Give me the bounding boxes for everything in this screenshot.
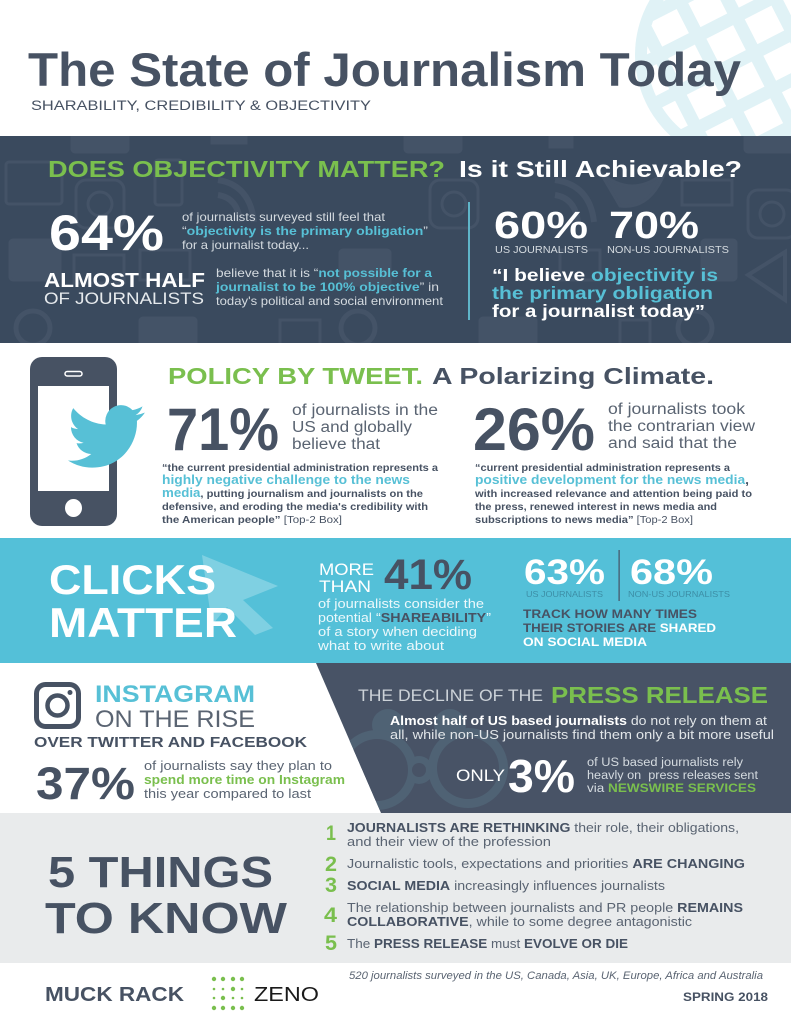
stat: almost half: ALMOST HALF (44, 270, 205, 292)
subtitle: SHARABILITY, CREDIBILITY & OBJECTIVITY (31, 98, 371, 113)
stat: more than 41% (319, 551, 472, 599)
stats: 63% and 68%: US JOURNALISTS (526, 589, 603, 599)
text: almost half description: today's political and social environment (216, 294, 444, 308)
text: shareability (317, 597, 491, 653)
text: track shares: THEIR STORIES ARE SHARED (523, 621, 716, 635)
text: shareability: potential “ SHAREABILITY ” (318, 611, 491, 625)
text: 37% description: of journalists say they plan to (144, 759, 332, 773)
heading (34, 681, 308, 751)
text: 64% description: of journalists surveyed still feel that (182, 210, 386, 224)
heading: 5 THINGS (48, 849, 273, 897)
heading (49, 556, 237, 646)
item 2 (325, 853, 745, 876)
item 1 (326, 821, 739, 849)
stat: more than 41%: THAN (319, 578, 371, 596)
stats: 60% and 70% (494, 205, 729, 256)
stats: 63% and 68%: NON-US JOURNALISTS (628, 589, 730, 599)
item 4: The relationship between journalists and PR people REMAINS (347, 901, 743, 915)
heading (358, 682, 768, 708)
icon: globe (635, 0, 791, 136)
stats: 63% and 68%: 63% (524, 553, 605, 592)
logo: muck rack: MUCK RACK (45, 984, 185, 1006)
heading: TO KNOW (45, 895, 288, 943)
icon: cursor arrow (202, 555, 278, 635)
stat: only 3% (456, 750, 575, 802)
survey note: 520 journalists surveyed in the US, Canada, Asia, UK, Europe, Africa and Australia (349, 970, 763, 982)
panel: instagram on the rise (34, 681, 345, 809)
logo: zeno wordmark: ZENO (254, 984, 319, 1006)
item 3: SOCIAL MEDIA increasingly influences journalists (347, 879, 665, 893)
item 3: 3 (325, 874, 337, 897)
quote: positive development: subscriptions to news media” [Top-2 Box] (475, 514, 693, 526)
panel: policy by tweet (30, 357, 756, 526)
quote: positive development (474, 462, 752, 526)
text: almost half: all, while non-US journalists find them only a bit more useful (390, 728, 774, 742)
text: 37% description (144, 759, 345, 801)
panel: objectivity (0, 125, 791, 348)
panel: clicks matter (0, 538, 791, 663)
text: 26% description (608, 401, 756, 452)
quote: positive development: positive development for the news media , (475, 473, 749, 487)
text: track shares (523, 607, 716, 649)
date: SPRING 2018 (683, 990, 768, 1004)
text: almost half description: believe that it is “ not possible for a (216, 266, 432, 280)
quote: negative challenge: media, putting journalism and journalists on the (162, 486, 423, 500)
text: 3% description (587, 757, 759, 795)
text: 3% description: via NEWSWIRE SERVICES (587, 783, 756, 795)
stats: 60% and 70%: 60% (494, 205, 588, 247)
text: shareability: of journalists consider the (318, 597, 484, 611)
footer (45, 970, 768, 1010)
quote: negative challenge: the American people” [Top-2 Box] (162, 514, 342, 526)
stats: 63% and 68% (524, 550, 730, 601)
stat: more than 41%: 41% (384, 551, 472, 599)
item 5 (325, 932, 628, 955)
heading: OVER TWITTER AND FACEBOOK (34, 735, 308, 751)
quote: negative challenge (162, 462, 438, 526)
icon: instagram (36, 684, 78, 726)
item 5: The PRESS RELEASE must EVOLVE OR DIE (347, 937, 628, 951)
item 1: 1 (326, 822, 336, 845)
heading: INSTAGRAM (95, 681, 255, 708)
icon: binoculars (337, 709, 508, 810)
item 4: 4 (324, 904, 337, 927)
text: 37% description: this year compared to last (144, 787, 312, 801)
quote: “I believe objectivity is (492, 265, 718, 285)
item 2: Journalistic tools, expectations and priorities ARE CHANGING (347, 857, 745, 871)
stat: almost half: OF JOURNALISTS (44, 289, 204, 308)
quote: the primary obligation (492, 283, 713, 303)
text: shareability: what to write about (317, 639, 445, 653)
heading: A Polarizing Climate. (432, 363, 714, 389)
text: almost half: Almost half of US based journalists do not rely on them at (390, 714, 768, 728)
quote (492, 265, 718, 321)
text: 64% description (182, 210, 428, 252)
stats: 60% and 70%: NON-US JOURNALISTS (607, 245, 729, 256)
stats: 60% and 70%: US JOURNALISTS (495, 245, 588, 256)
item 4: COLLABORATIVE , while to some degree antagonistic (347, 915, 692, 929)
icon pattern background (6, 125, 791, 348)
stats: 60% and 70%: 70% (609, 205, 699, 247)
text: 71% description: US and globally (292, 419, 412, 436)
stat: 26%: 26% (473, 396, 595, 463)
item 3 (325, 874, 665, 897)
text: 37% description: spend more time on Instagram (144, 773, 345, 787)
heading: DOES OBJECTIVITY MATTER? (48, 156, 445, 182)
quote: for a journalist today” (492, 301, 705, 321)
item 4 (324, 901, 743, 929)
item 5: 5 (325, 932, 337, 955)
quote: negative challenge: “the current presidential administration represents a (162, 462, 438, 474)
text: 71% description: believe that (292, 436, 381, 453)
text: almost half (390, 714, 774, 742)
stat: almost half (44, 270, 205, 308)
text: 26% description: of journalists took (608, 401, 745, 418)
heading (168, 363, 714, 389)
heading: CLICKS (49, 556, 216, 603)
heading: PRESS RELEASE (551, 682, 768, 708)
quote: negative challenge: highly negative challenge to the news (162, 473, 410, 487)
text: 3% description: of US based journalists rely (587, 757, 743, 769)
panel: decline of the press release (316, 663, 791, 813)
item 2: 2 (325, 853, 337, 876)
stats: 63% and 68%: 68% (630, 553, 713, 592)
text: shareability: of a story when deciding (318, 625, 477, 639)
stat: 71%: 71% (167, 396, 279, 463)
heading (45, 849, 288, 943)
text: 64% description: “objectivity is the primary obligation ” (182, 224, 428, 238)
quote: positive development: with increased relevance and attention being paid to (474, 488, 752, 500)
heading: POLICY BY TWEET. (168, 363, 423, 389)
stat: 64%: 64% (49, 205, 164, 261)
text: almost half description: journalist to be 100% objective ” in (215, 280, 439, 294)
text: track shares: ON SOCIAL MEDIA (523, 635, 647, 649)
panel: 5 things to know (0, 813, 791, 963)
title: The State of Journalism Today (28, 44, 742, 97)
quote: negative challenge: defensive, and eroding the media's credibility with (162, 501, 428, 513)
text: 3% description: heavly on press releases sent (587, 770, 759, 782)
stat: only 3%: 3% (508, 750, 575, 802)
quote: positive development: the press, renewed interest in news media and (475, 501, 717, 513)
stat: only 3%: ONLY (456, 766, 505, 785)
text: 26% description: and said that the (608, 435, 737, 452)
text: 71% description (292, 402, 438, 453)
heading: MATTER (49, 599, 237, 646)
text: almost half description (215, 266, 444, 308)
heading: ON THE RISE (95, 706, 255, 733)
heading: THE DECLINE OF THE (358, 687, 543, 705)
quote: positive development: “current presidential administration represents a (475, 462, 730, 474)
icon: twitter bird (68, 405, 145, 468)
text: 71% description: of journalists in the (292, 402, 438, 419)
heading: Is it Still Achievable? (459, 156, 742, 182)
item 1: JOURNALISTS ARE RETHINKING their role, their obligations, (347, 821, 739, 835)
item 1: and their view of the profession (347, 835, 551, 849)
stat: more than 41%: MORE (319, 561, 374, 579)
text: 64% description: for a journalist today... (182, 238, 309, 252)
text: 26% description: the contrarian view (608, 418, 756, 435)
heading (48, 156, 742, 182)
logo: zeno dots (212, 977, 244, 1010)
stat: 37%: 37% (36, 758, 135, 809)
header (28, 0, 791, 136)
icon: phone (30, 357, 117, 526)
text: track shares: TRACK HOW MANY TIMES (523, 607, 697, 621)
